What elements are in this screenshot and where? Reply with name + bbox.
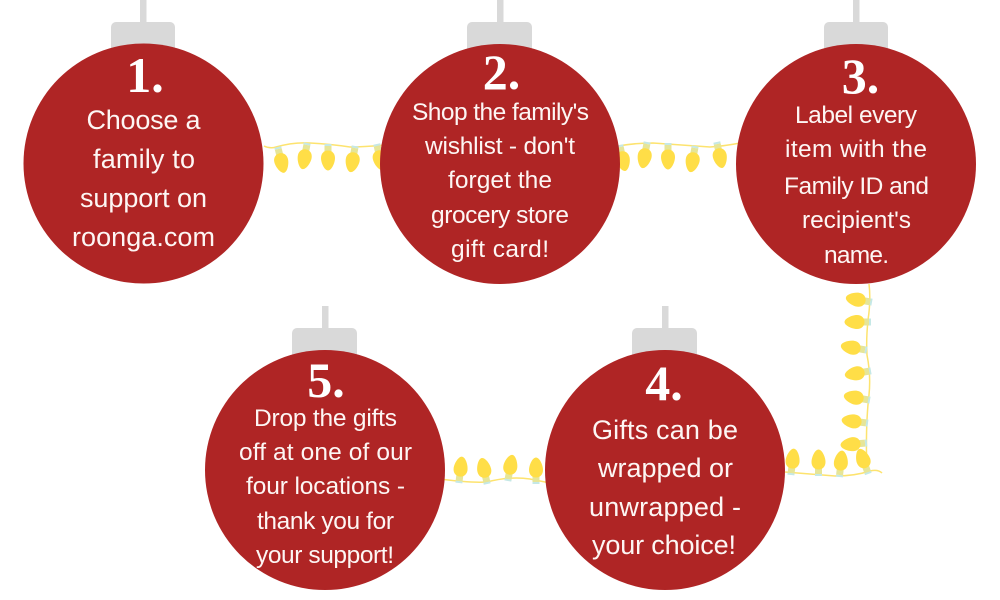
ornament: step 4	[545, 306, 785, 590]
ornament: step 3: name.	[824, 242, 889, 269]
ornament: step 3	[736, 0, 976, 284]
ornament: step 1: roonga.com	[72, 222, 215, 252]
ornament: step 3: Label every	[795, 102, 918, 129]
ornament: step 4: wrapped or	[597, 453, 733, 483]
ornament: step 1: support on	[80, 183, 207, 213]
ornament: step 4: Gifts can be	[592, 415, 738, 445]
ornament: step 5: Drop the gifts	[254, 405, 397, 432]
ornament: step 3: 3.	[842, 48, 879, 104]
ornament: step 2: gift card!	[451, 236, 549, 263]
string of lights: step 1 to 2	[264, 142, 389, 174]
ornament: step 2: wishlist - don't	[424, 133, 575, 160]
ornament: step 2	[380, 0, 620, 284]
ornament: step 4: 4.	[645, 355, 683, 411]
string of lights: step 2 to 3	[613, 141, 740, 173]
ornament: step 5: four locations -	[246, 473, 405, 500]
ornament: step 5: your support!	[256, 542, 394, 569]
ornament: step 3: recipient's	[802, 207, 911, 234]
ornament: step 2: 2.	[483, 44, 520, 100]
ornament: step 5: 5.	[307, 352, 345, 408]
string of lights: step 3 down to 4	[784, 284, 882, 478]
ornament: step 4: unwrapped -	[589, 492, 741, 522]
ornament: step 1: Choose a	[86, 105, 201, 135]
ornament: step 5: thank you for	[257, 508, 394, 535]
ornament: step 1: family to	[93, 144, 195, 174]
ornament: step 4: your choice!	[592, 530, 736, 560]
string of lights: step 4 to 5	[440, 454, 550, 485]
ornament: step 3: item with the	[785, 136, 927, 163]
ornament: step 5	[205, 306, 445, 590]
ornament: step 2: grocery store	[431, 202, 569, 229]
ornament: step 2: Shop the family's	[412, 99, 589, 126]
ornament: step 1: 1.	[126, 47, 164, 103]
ornament: step 5: off at one of our	[239, 439, 412, 466]
ornament: step 2: forget the	[448, 167, 552, 194]
ornament: step 1	[24, 0, 264, 284]
ornament: step 3: Family ID and	[784, 173, 929, 200]
